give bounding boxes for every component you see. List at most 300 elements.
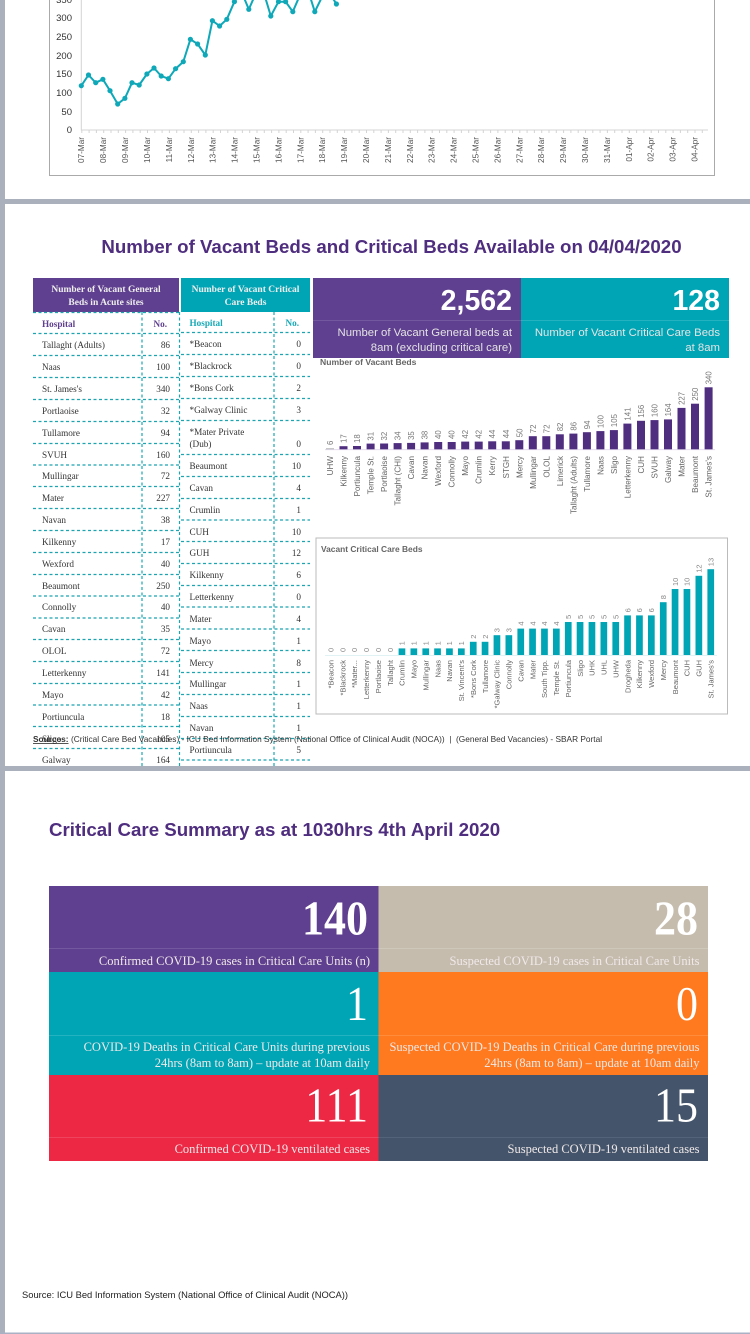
category labels: vacant beds: Tallaght (CHI) (394, 456, 403, 505)
source footnote: Source: ICU Bed Information System (National Office of Clinical Audit (NOCA)) (22, 1290, 348, 1300)
table rows: critical care beds: 1 (296, 636, 301, 646)
bar value labels: vacant beds: 18 (353, 434, 362, 443)
bar value labels: vacant beds: 164 (664, 403, 673, 416)
x axis date labels: 18-Mar (318, 137, 327, 163)
bar value labels: critical care beds: 3 (493, 628, 502, 632)
category labels: critical care beds: Temple St. (552, 660, 561, 695)
bar value labels: critical care beds: 0 (338, 648, 347, 652)
bar value labels: critical care beds: 1 (421, 641, 430, 645)
bar value labels: critical care beds: 0 (374, 648, 383, 652)
category labels: vacant beds: St. James's (705, 456, 714, 498)
KPI card: vacant critical care beds (521, 278, 729, 358)
bar value labels: vacant beds: 35 (407, 431, 416, 440)
category labels: critical care beds: Mercy (659, 660, 668, 680)
bar value labels: vacant beds: 44 (502, 429, 511, 438)
bar value labels: critical care beds: 2 (481, 635, 490, 639)
chart title: Number of Vacant Beds (320, 357, 417, 367)
category labels: vacant beds: Mercy (515, 455, 524, 478)
bar value labels: critical care beds: 0 (362, 648, 371, 652)
bar value labels: vacant beds: 94 (583, 420, 592, 429)
table rows: critical care beds: Crumlin (190, 505, 221, 515)
table rows: critical care beds: Mullingar (190, 679, 226, 689)
table rows: critical care beds: 2 (296, 383, 301, 393)
x axis date labels: 01-Apr (625, 137, 634, 162)
bar value labels: critical care beds: 1 (457, 641, 466, 645)
category labels: critical care beds: Kilkenny (635, 660, 644, 688)
category labels: vacant beds: Sligo (610, 456, 619, 474)
bar value labels: critical care beds: 5 (588, 615, 597, 619)
bar value labels: critical care beds: 0 (350, 648, 359, 652)
bar value labels: vacant beds: 156 (637, 405, 646, 418)
category labels: critical care beds: Sligo (576, 660, 585, 677)
bar value labels: vacant beds: 100 (596, 414, 605, 428)
table rows: critical care beds: 4 (296, 483, 301, 493)
category labels: critical care beds: Portiuncula (564, 659, 573, 698)
table rows: general beds: 160 (156, 450, 170, 460)
table rows: general beds: Tullamore (42, 428, 80, 438)
bar value labels: vacant beds: 40 (434, 430, 443, 439)
line chart: daily trend 07-Mar to 04-Apr (50, 0, 714, 176)
bar value labels: critical care beds: 5 (600, 615, 608, 619)
table rows: critical care beds: *Bons Cork (190, 383, 234, 393)
category labels: critical care beds: St. Vincent's (457, 660, 466, 701)
summary card: confirmed deaths (49, 972, 378, 1075)
table rows: critical care beds: *Beacon (190, 339, 222, 349)
category labels: vacant beds: Letterkenny (623, 455, 632, 498)
bar value labels: critical care beds: 5 (611, 615, 620, 619)
x axis date labels: 27-Mar (515, 137, 524, 163)
bar value labels: vacant beds: 72 (542, 425, 551, 433)
category labels: critical care beds: Letterkenny (362, 660, 371, 699)
table rows: general beds: Portiuncula (42, 712, 84, 722)
table rows: general beds: 100 (156, 362, 170, 372)
bar value labels: vacant beds: 34 (394, 431, 403, 440)
table rows: general beds: Mater (42, 493, 64, 503)
category labels: critical care beds: Drogheda (623, 659, 632, 693)
table rows: critical care beds: Mater (190, 614, 211, 624)
bar value labels: critical care beds: 13 (706, 558, 715, 566)
category labels: vacant beds: Connolly (448, 455, 457, 488)
table rows: general beds: 40 (161, 559, 170, 569)
bar value labels: critical care beds: 1 (433, 641, 442, 645)
table rows: critical care beds: 12 (292, 548, 301, 558)
summary card: suspected cases: Suspected COVID-19 cases in Critical Care Units (450, 954, 700, 968)
table rows: general beds: Portlaoise (42, 406, 79, 416)
table rows: critical care beds: Naas (190, 701, 208, 711)
category labels: critical care beds: *Blackrock (338, 660, 347, 695)
x axis date labels: 23-Mar (428, 137, 437, 163)
table rows: critical care beds: Beaumont (190, 461, 228, 471)
bar value labels: vacant beds: 227 (678, 392, 686, 405)
summary card: suspected cases: 28 (654, 893, 698, 946)
category labels: critical care beds: CUH (683, 660, 692, 676)
trend line with markers (79, 0, 339, 107)
y axis labels: 50 (61, 107, 72, 118)
bar value labels: critical care beds: 1 (398, 641, 407, 645)
x axis date labels: 26-Mar (493, 137, 502, 163)
table rows: critical care beds: 4 (296, 614, 301, 624)
sources note: Sources: (33, 734, 69, 744)
x axis date labels: 22-Mar (406, 137, 415, 163)
category labels: vacant beds: OLOL (542, 456, 551, 478)
table rows: general beds: Connolly (42, 602, 77, 612)
category labels: vacant beds: Kilkenny (340, 455, 348, 487)
table rows: general beds: Cavan (42, 624, 66, 634)
bar value labels: critical care beds: 5 (564, 615, 573, 619)
table rows: general beds: Mayo (42, 690, 64, 700)
bar value labels: vacant beds: 44 (488, 429, 497, 438)
category labels: critical care beds: Crumlin (398, 660, 407, 686)
heading: critical care summary: Critical Care Summary as at 1030hrs 4th April 2020 (49, 819, 500, 840)
category labels: vacant beds: Cavan (407, 456, 416, 479)
table header: critical care beds: Number of Vacant Critical (192, 285, 300, 295)
table column headings: critical care beds (190, 318, 299, 328)
y axis labels (56, 0, 72, 136)
x axis date labels: 12-Mar (187, 137, 196, 163)
x axis date labels: 30-Mar (581, 137, 590, 163)
bar value labels: critical care beds: 5 (576, 615, 585, 619)
bar value labels: vacant beds: 17 (340, 434, 348, 443)
table header: general beds (33, 278, 179, 312)
table rows: critical care beds: Mayo (190, 636, 211, 646)
bar value labels: critical care beds: 6 (623, 608, 632, 612)
table rows: general beds (42, 340, 170, 765)
bar value labels: vacant beds: 141 (623, 408, 632, 421)
table rows: general beds: 340 (156, 384, 170, 394)
sources note: (Critical Care Bed Vacancies) - ICU Bed Information System (National Office of Clinical Audit (NOCA)) | (General Bed Vacancies) - SBAR Portal (71, 734, 602, 744)
table rows: critical care beds: 10 (292, 461, 301, 471)
category labels: critical care beds: *Bons Cork (469, 660, 478, 698)
category labels: vacant beds: Tallaght (Adults) (569, 456, 578, 514)
bar value labels: vacant beds: 105 (610, 413, 619, 427)
bar value labels: vacant beds: 50 (515, 428, 524, 437)
table header: critical care beds: Care Beds (225, 298, 267, 308)
table: vacant general beds (33, 278, 180, 766)
summary card: confirmed ventilated: Confirmed COVID-19 ventilated cases (175, 1142, 370, 1156)
category labels: vacant beds: UHW (326, 456, 335, 475)
x axis date labels: 24-Mar (450, 137, 459, 163)
table rows: critical care beds: GUH (190, 548, 210, 558)
category labels: vacant beds: Portiuncula (353, 456, 362, 496)
table rows: critical care beds: (Dub) (190, 439, 211, 449)
summary card: confirmed deaths: 1 (346, 978, 368, 1032)
x axis date labels: 19-Mar (340, 137, 349, 163)
table rows: critical care beds: 0 (296, 439, 301, 449)
x axis date labels (77, 137, 700, 163)
bar value labels: vacant beds: 42 (461, 430, 470, 439)
category labels: vacant beds: SVUH (650, 456, 660, 478)
table rows: general beds: Tallaght (Adults) (42, 340, 105, 350)
bar value labels: critical care beds: 2 (469, 635, 478, 639)
category labels: vacant beds: Temple St. (367, 456, 376, 494)
table rows: critical care beds: 0 (296, 339, 301, 349)
category labels: critical care beds: Mayo (410, 660, 418, 678)
table rows: general beds: Mullingar (42, 471, 79, 481)
x axis date labels: 16-Mar (274, 137, 283, 163)
summary card: suspected cases (378, 886, 708, 972)
table rows: critical care beds: Mercy (190, 658, 214, 668)
table rows: general beds: 141 (156, 668, 170, 678)
table rows: general beds: 38 (161, 515, 170, 525)
table rows: general beds: 164 (156, 755, 170, 765)
bar value labels: critical care beds: 4 (516, 621, 525, 626)
KPI card: vacant critical care beds: Number of Vacant Critical Care Beds (535, 327, 720, 339)
table rows: critical care beds: Letterkenny (190, 592, 234, 602)
x axis date labels: 10-Mar (143, 137, 152, 163)
x axis date labels: 02-Apr (647, 137, 656, 162)
bar value labels: vacant beds: 340 (705, 371, 714, 384)
table rows: critical care beds: 1 (296, 505, 301, 515)
category labels: critical care beds (326, 659, 715, 708)
table rows: critical care beds: 0 (296, 361, 301, 371)
category labels: critical care beds: South Tipp. (540, 660, 549, 698)
table rows: general beds: 17 (161, 537, 170, 547)
table rows: critical care beds: *Galway Clinic (190, 405, 247, 415)
category labels: vacant beds: STGH (502, 456, 511, 478)
x axis date labels: 28-Mar (537, 137, 546, 163)
table rows: general beds: 72 (161, 471, 170, 481)
table rows: critical care beds: 1 (296, 679, 301, 689)
bar value labels: vacant beds: 40 (448, 430, 457, 439)
table rows: general beds: 105 (156, 734, 170, 744)
x axis date labels: 13-Mar (209, 137, 218, 163)
bar value labels: critical care beds (326, 558, 715, 652)
summary card: confirmed cases (49, 886, 378, 972)
table rows: critical care beds: Kilkenny (190, 570, 224, 580)
category labels: critical care beds: Connolly (504, 660, 514, 689)
table column headings: critical care beds: No. (285, 318, 299, 328)
category labels: critical care beds: *Galway Clinic (493, 660, 502, 708)
table rows: general beds: St. James's (42, 384, 82, 394)
summary card: confirmed cases: Confirmed COVID-19 cases in Critical Care Units (n) (99, 954, 370, 968)
table rows: critical care beds: 8 (296, 658, 301, 668)
table rows: critical care beds: 5 (296, 745, 301, 755)
x axis date labels: 11-Mar (165, 137, 174, 162)
table column headings: general beds: No. (153, 319, 167, 329)
x axis date labels: 21-Mar (384, 137, 393, 163)
bar value labels: critical care beds: 8 (659, 595, 668, 599)
summary card: suspected ventilated: 15 (654, 1080, 698, 1133)
x axis date labels: 04-Apr (690, 137, 700, 162)
category labels: critical care beds: UHL (600, 660, 608, 675)
bar value labels: critical care beds: 1 (445, 641, 454, 645)
table rows: critical care beds: 0 (296, 592, 301, 602)
category labels: critical care beds: Cavan (516, 660, 525, 682)
table rows: critical care beds: Navan (190, 723, 214, 733)
table rows: critical care beds: CUH (190, 527, 209, 537)
x axis date labels: 08-Mar (99, 137, 108, 163)
table rows: general beds: Naas (42, 362, 61, 372)
x axis date labels: 29-Mar (559, 137, 568, 163)
table rows: general beds: Kilkenny (42, 537, 77, 547)
category labels: critical care beds: Portlaoise (374, 660, 383, 693)
category labels: vacant beds: Tullamore (583, 456, 592, 492)
bar value labels: critical care beds: 12 (694, 564, 704, 573)
summary card: confirmed deaths: COVID-19 Deaths in Critical Care Units during previous (84, 1040, 370, 1054)
summary card: suspected deaths: 24hrs (8am to 8am) – update at 10am daily (484, 1056, 700, 1070)
bar value labels: vacant beds: 250 (691, 387, 700, 401)
category labels: critical care beds: Naas (433, 660, 442, 678)
bar value labels: critical care beds: 4 (540, 621, 549, 626)
category labels: vacant beds: Naas (596, 456, 605, 475)
category labels: critical care beds: UHW (611, 659, 620, 678)
table rows: general beds: 35 (161, 624, 170, 634)
y axis labels: 150 (56, 69, 72, 80)
table: vacant critical care beds (181, 278, 310, 766)
KPI card: vacant general beds: 2,562 (441, 285, 512, 317)
category labels: vacant beds: Mullingar (529, 456, 538, 489)
table rows: general beds: 32 (161, 406, 170, 416)
table rows: general beds: OLOL (42, 646, 67, 656)
x axis date labels: 25-Mar (472, 137, 480, 163)
table column headings: general beds: Hospital (42, 319, 76, 329)
summary card: confirmed cases: 140 (302, 893, 368, 946)
table rows: general beds: Letterkenny (42, 668, 87, 678)
table rows: critical care beds: 3 (296, 405, 301, 415)
x axis date labels: 14-Mar (231, 137, 240, 163)
x axis date labels: 31-Mar (603, 137, 612, 163)
x axis date labels: 07-Mar (77, 137, 86, 163)
table rows: critical care beds: 10 (292, 527, 301, 537)
category labels: critical care beds: Tallaght (386, 659, 395, 686)
KPI card: vacant general beds: 8am (excluding critical care) (371, 342, 512, 354)
summary card: suspected ventilated (378, 1075, 708, 1161)
KPI card: vacant general beds (313, 278, 521, 358)
chart title: Vacant Critical Care Beds (321, 544, 423, 554)
KPI card: vacant critical care beds: at 8am (685, 342, 720, 354)
table rows: critical care beds: *Blackrock (190, 361, 232, 371)
table rows: critical care beds (190, 339, 301, 755)
y axis labels: 100 (56, 88, 72, 99)
category labels: vacant beds: Beaumont (691, 455, 700, 493)
bar value labels: critical care beds: 3 (504, 628, 514, 632)
heading: vacant beds section: Number of Vacant Beds and Critical Beds Available on 04/04/2020 (101, 236, 682, 257)
bar value labels: vacant beds: 38 (421, 431, 430, 439)
x axis date labels: 17-Mar (296, 137, 305, 163)
category labels: vacant beds: Portlaoise (380, 456, 389, 492)
category labels: critical care beds: Mullingar (421, 660, 430, 690)
table header: critical care beds (181, 278, 310, 312)
category labels: critical care beds: Navan (445, 660, 454, 682)
category labels: vacant beds (326, 455, 714, 514)
category labels: vacant beds: Kerry (488, 455, 497, 475)
bar value labels: vacant beds: 31 (367, 432, 376, 441)
bar value labels: critical care beds: 10 (683, 578, 692, 586)
table rows: general beds: Navan (42, 515, 66, 525)
category labels: critical care beds: Beaumont (671, 659, 680, 694)
table rows: general beds: Galway (42, 755, 71, 765)
table rows: general beds: 86 (161, 340, 170, 350)
summary card: suspected deaths: Suspected COVID-19 Deaths in Critical Care during previous (389, 1040, 700, 1054)
summary card: confirmed ventilated: 111 (305, 1080, 368, 1133)
summary card: suspected deaths (378, 972, 708, 1075)
category labels: vacant beds: Crumlin (475, 456, 484, 484)
table rows: general beds: 18 (161, 712, 170, 722)
category labels: vacant beds: Galway (664, 455, 673, 483)
bar chart: number of vacant beds (320, 357, 715, 514)
summary card: suspected ventilated: Suspected COVID-19 ventilated cases (508, 1142, 700, 1156)
bar value labels: critical care beds: 4 (528, 621, 537, 626)
x axis date labels: 09-Mar (121, 137, 130, 163)
bar chart: vacant critical care beds (316, 538, 728, 714)
table header: general beds: Number of Vacant General (51, 285, 161, 295)
category labels: critical care beds: UHK (588, 660, 597, 676)
table rows: general beds: Sligo (42, 734, 62, 744)
category labels: vacant beds: Mayo (461, 456, 470, 476)
category labels: critical care beds: St. James's (706, 660, 715, 699)
bar value labels: critical care beds: 0 (326, 648, 335, 652)
bar value labels: vacant beds: 32 (380, 432, 389, 440)
table rows: general beds: 42 (161, 690, 170, 700)
category labels: critical care beds: GUH (694, 660, 704, 677)
table rows: critical care beds: Portiuncula (190, 745, 232, 755)
y axis labels: 250 (56, 32, 72, 43)
table rows: general beds: SVUH (42, 450, 67, 460)
category labels: vacant beds: Mater (678, 456, 686, 477)
KPI card: vacant general beds: Number of Vacant General beds at (338, 327, 513, 339)
category labels: vacant beds: Navan (421, 456, 430, 479)
bar value labels: critical care beds: 0 (386, 648, 395, 652)
table rows: critical care beds: 1 (296, 723, 301, 733)
table rows: general beds: Beaumont (42, 581, 80, 591)
x axis date labels: 20-Mar (362, 137, 371, 163)
table rows: critical care beds: Cavan (190, 483, 213, 493)
summary card: confirmed ventilated (49, 1075, 378, 1161)
bar value labels: vacant beds: 72 (529, 425, 538, 433)
table column headings: general beds (42, 319, 167, 329)
bars: critical care beds by hospital (399, 569, 714, 655)
x axis date labels: 15-Mar (252, 137, 262, 163)
bars: vacant beds by hospital (326, 387, 713, 449)
table rows: critical care beds: 1 (296, 701, 301, 711)
table rows: general beds: 227 (156, 493, 170, 503)
category labels: critical care beds: Mater (528, 659, 537, 679)
table rows: critical care beds: 6 (296, 570, 301, 580)
KPI card: vacant critical care beds: 128 (672, 285, 720, 317)
bar value labels: vacant beds: 82 (556, 423, 565, 431)
y axis labels: 0 (67, 125, 72, 136)
bar value labels: vacant beds: 6 (326, 441, 335, 445)
x axis date labels: 03-Apr (669, 137, 678, 162)
bar value labels: critical care beds: 6 (647, 608, 656, 612)
table rows: general beds: 250 (156, 581, 170, 591)
y axis labels: 200 (56, 51, 72, 62)
bar value labels: vacant beds (326, 371, 714, 445)
table rows: general beds: Wexford (42, 559, 74, 569)
category labels: vacant beds: CUH (637, 456, 646, 474)
bar value labels: vacant beds: 86 (569, 422, 578, 431)
summary card: suspected deaths: 0 (676, 978, 698, 1032)
bar value labels: critical care beds: 4 (552, 621, 561, 626)
bar value labels: vacant beds: 160 (650, 403, 660, 417)
category labels: critical care beds: Tullamore (481, 660, 490, 693)
table rows: general beds: 94 (161, 428, 170, 438)
bar value labels: critical care beds: 10 (671, 578, 680, 586)
y axis labels: 300 (56, 13, 72, 24)
category labels: critical care beds: *Beacon (326, 660, 335, 688)
category labels: vacant beds: Wexford (434, 456, 443, 486)
bar value labels: critical care beds: 6 (635, 608, 644, 612)
table rows: general beds: 40 (161, 602, 170, 612)
table column headings: critical care beds: Hospital (190, 318, 223, 328)
category labels: critical care beds: Wexford (647, 660, 656, 688)
table rows: general beds: 72 (161, 646, 170, 656)
category labels: critical care beds: *Mater... (350, 660, 359, 688)
category labels: vacant beds: Limerick (556, 455, 565, 486)
bar value labels: vacant beds: 42 (475, 430, 484, 439)
bar value labels: critical care beds: 1 (410, 641, 418, 645)
table header: general beds: Beds in Acute sites (68, 298, 144, 308)
